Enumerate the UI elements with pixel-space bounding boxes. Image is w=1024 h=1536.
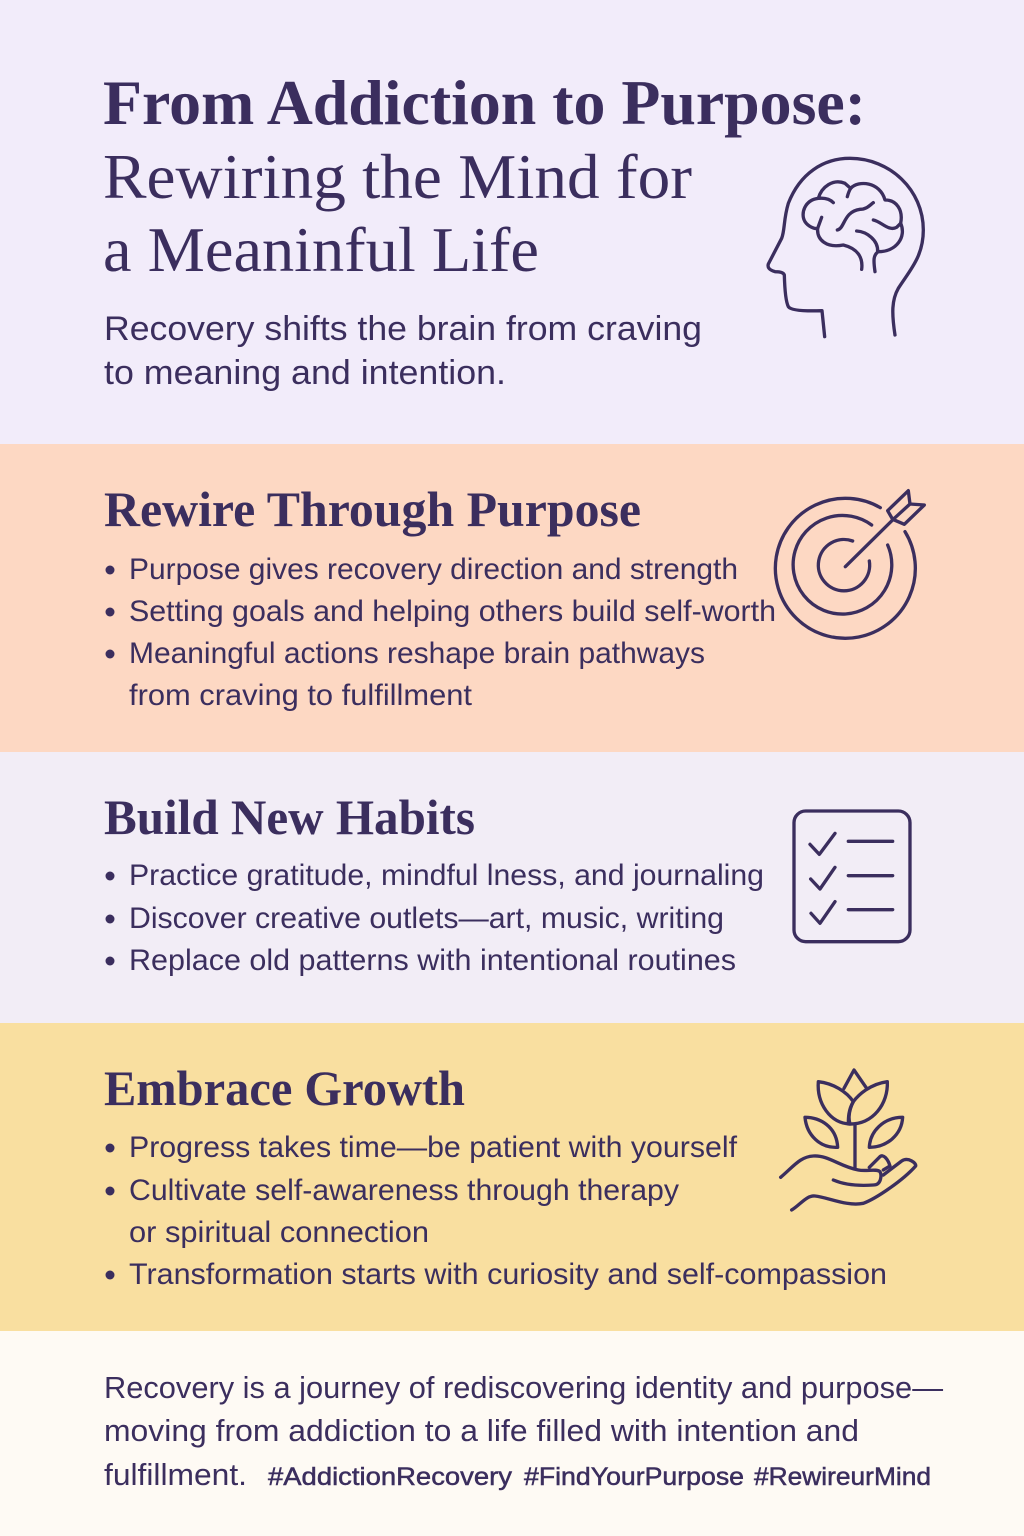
bullet list: purpose: Purpose gives recovery direction and strength [129,553,738,586]
subtitle [104,310,702,392]
heading: build new habits: Build New Habits [104,789,475,845]
bullet list: purpose: from craving to fulfillment [129,679,473,712]
hashtags: #RewireurMind [754,1463,931,1491]
icon: hand holding plant [781,1070,916,1210]
closing statement: moving from addiction to a life filled with intention and [104,1413,859,1448]
closing statement [104,1370,943,1492]
bullet list: growth: Transformation starts with curiosity and self-compassion [129,1258,887,1291]
bullet list: habits: Practice gratitude, mindful lness, and journaling [129,859,764,892]
bullet list: habits: Discover creative outlets—art, music, writing [129,902,724,935]
hashtags: #FindYourPurpose [524,1463,744,1491]
closing statement: Recovery is a journey of rediscovering identity and purpose— [104,1370,943,1405]
subtitle: to meaning and intention. [104,354,506,392]
subtitle: Recovery shifts the brain from craving [104,310,702,348]
title [103,67,866,285]
bullet list: growth: Cultivate self-awareness through therapy [129,1174,679,1207]
hashtags [268,1463,931,1491]
bullet list: habits: Replace old patterns with intentional routines [129,944,736,977]
bullet list: growth [106,1131,887,1291]
icon: checklist [794,811,910,942]
panel: rewire through purpose [0,444,1024,752]
title: From Addiction to Purpose: [103,67,866,138]
title: Rewiring the Mind for [103,141,692,212]
bullet list: purpose: Setting goals and helping others build self-worth [129,595,776,628]
bullet list: growth: Progress takes time—be patient with yourself [129,1131,738,1164]
panel: footer [0,1331,1024,1536]
panel: build new habits [0,752,1024,1023]
bullet list: purpose: Meaningful actions reshape brain pathways [129,637,705,670]
panel: embrace growth [0,1023,1024,1331]
heading: rewire through purpose: Rewire Through Purpose [104,481,641,537]
icon: head with brain [768,158,923,337]
heading: embrace growth: Embrace Growth [104,1060,465,1116]
bullet list: purpose [106,553,776,712]
title: a Meaninful Life [103,214,539,285]
hashtags: #AddictionRecovery [268,1463,513,1491]
bullet list: growth: or spiritual connection [129,1216,429,1249]
bullet list: habits [106,859,764,977]
closing statement: fulfillment. [104,1457,247,1492]
icon: target with arrow [775,491,924,638]
panel: header [0,0,1024,444]
